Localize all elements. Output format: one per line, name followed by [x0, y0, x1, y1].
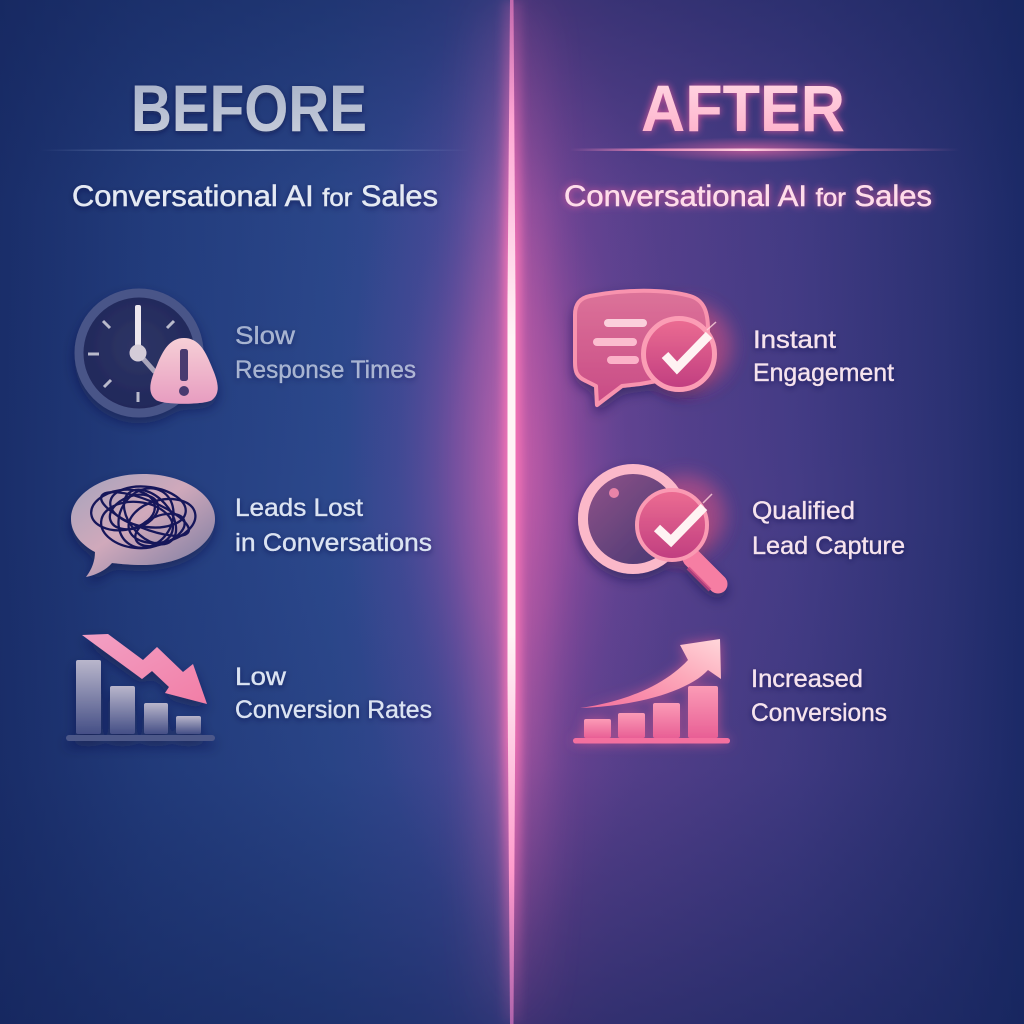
icon: clock with alert — [79, 293, 218, 413]
label: leads lost in conversations: in Conversations — [235, 529, 432, 557]
label: instant engagement: Engagement — [753, 359, 894, 387]
label: instant engagement: Instant — [753, 326, 836, 354]
background: before panel — [0, 0, 512, 1024]
panel: after column — [564, 71, 960, 744]
panel: before column — [40, 71, 470, 741]
background central glow — [347, 0, 677, 940]
label: qualified lead capture: Lead Capture — [752, 532, 905, 560]
icon: tangled speech bubble — [71, 474, 215, 577]
label: low conversion rates: Conversion Rates — [235, 696, 432, 724]
background: after panel — [512, 0, 1024, 1024]
label: increased conversions — [751, 665, 887, 727]
glowing centre divider — [482, 0, 542, 1024]
icon: magnifier with check — [583, 469, 725, 590]
label: increased conversions: Conversions — [751, 699, 887, 727]
label: slow response times: Slow — [235, 322, 296, 350]
label: qualified lead capture — [752, 497, 905, 560]
label: slow response times — [235, 322, 416, 384]
label: increased conversions: Increased — [751, 665, 863, 693]
label: slow response times: Response Times — [235, 356, 416, 384]
label: qualified lead capture: Qualified — [752, 497, 855, 525]
label: instant engagement — [753, 326, 894, 387]
divider: before — [40, 150, 470, 151]
icon: falling bar chart — [66, 634, 215, 741]
heading: before: BEFORE — [131, 71, 367, 145]
heading: after: AFTER — [641, 71, 845, 145]
icon: rising bar chart — [573, 639, 730, 744]
divider: after — [570, 137, 960, 163]
icon: chat bubble with check — [575, 291, 732, 405]
label: leads lost in conversations: Leads Lost — [235, 494, 363, 522]
label: leads lost in conversations — [235, 494, 432, 557]
label: low conversion rates: Low — [235, 663, 287, 691]
label: low conversion rates — [235, 663, 432, 724]
subtitle: after: Conversational AI for Sales — [564, 180, 932, 213]
subtitle: before: Conversational AI for Sales — [72, 180, 438, 213]
